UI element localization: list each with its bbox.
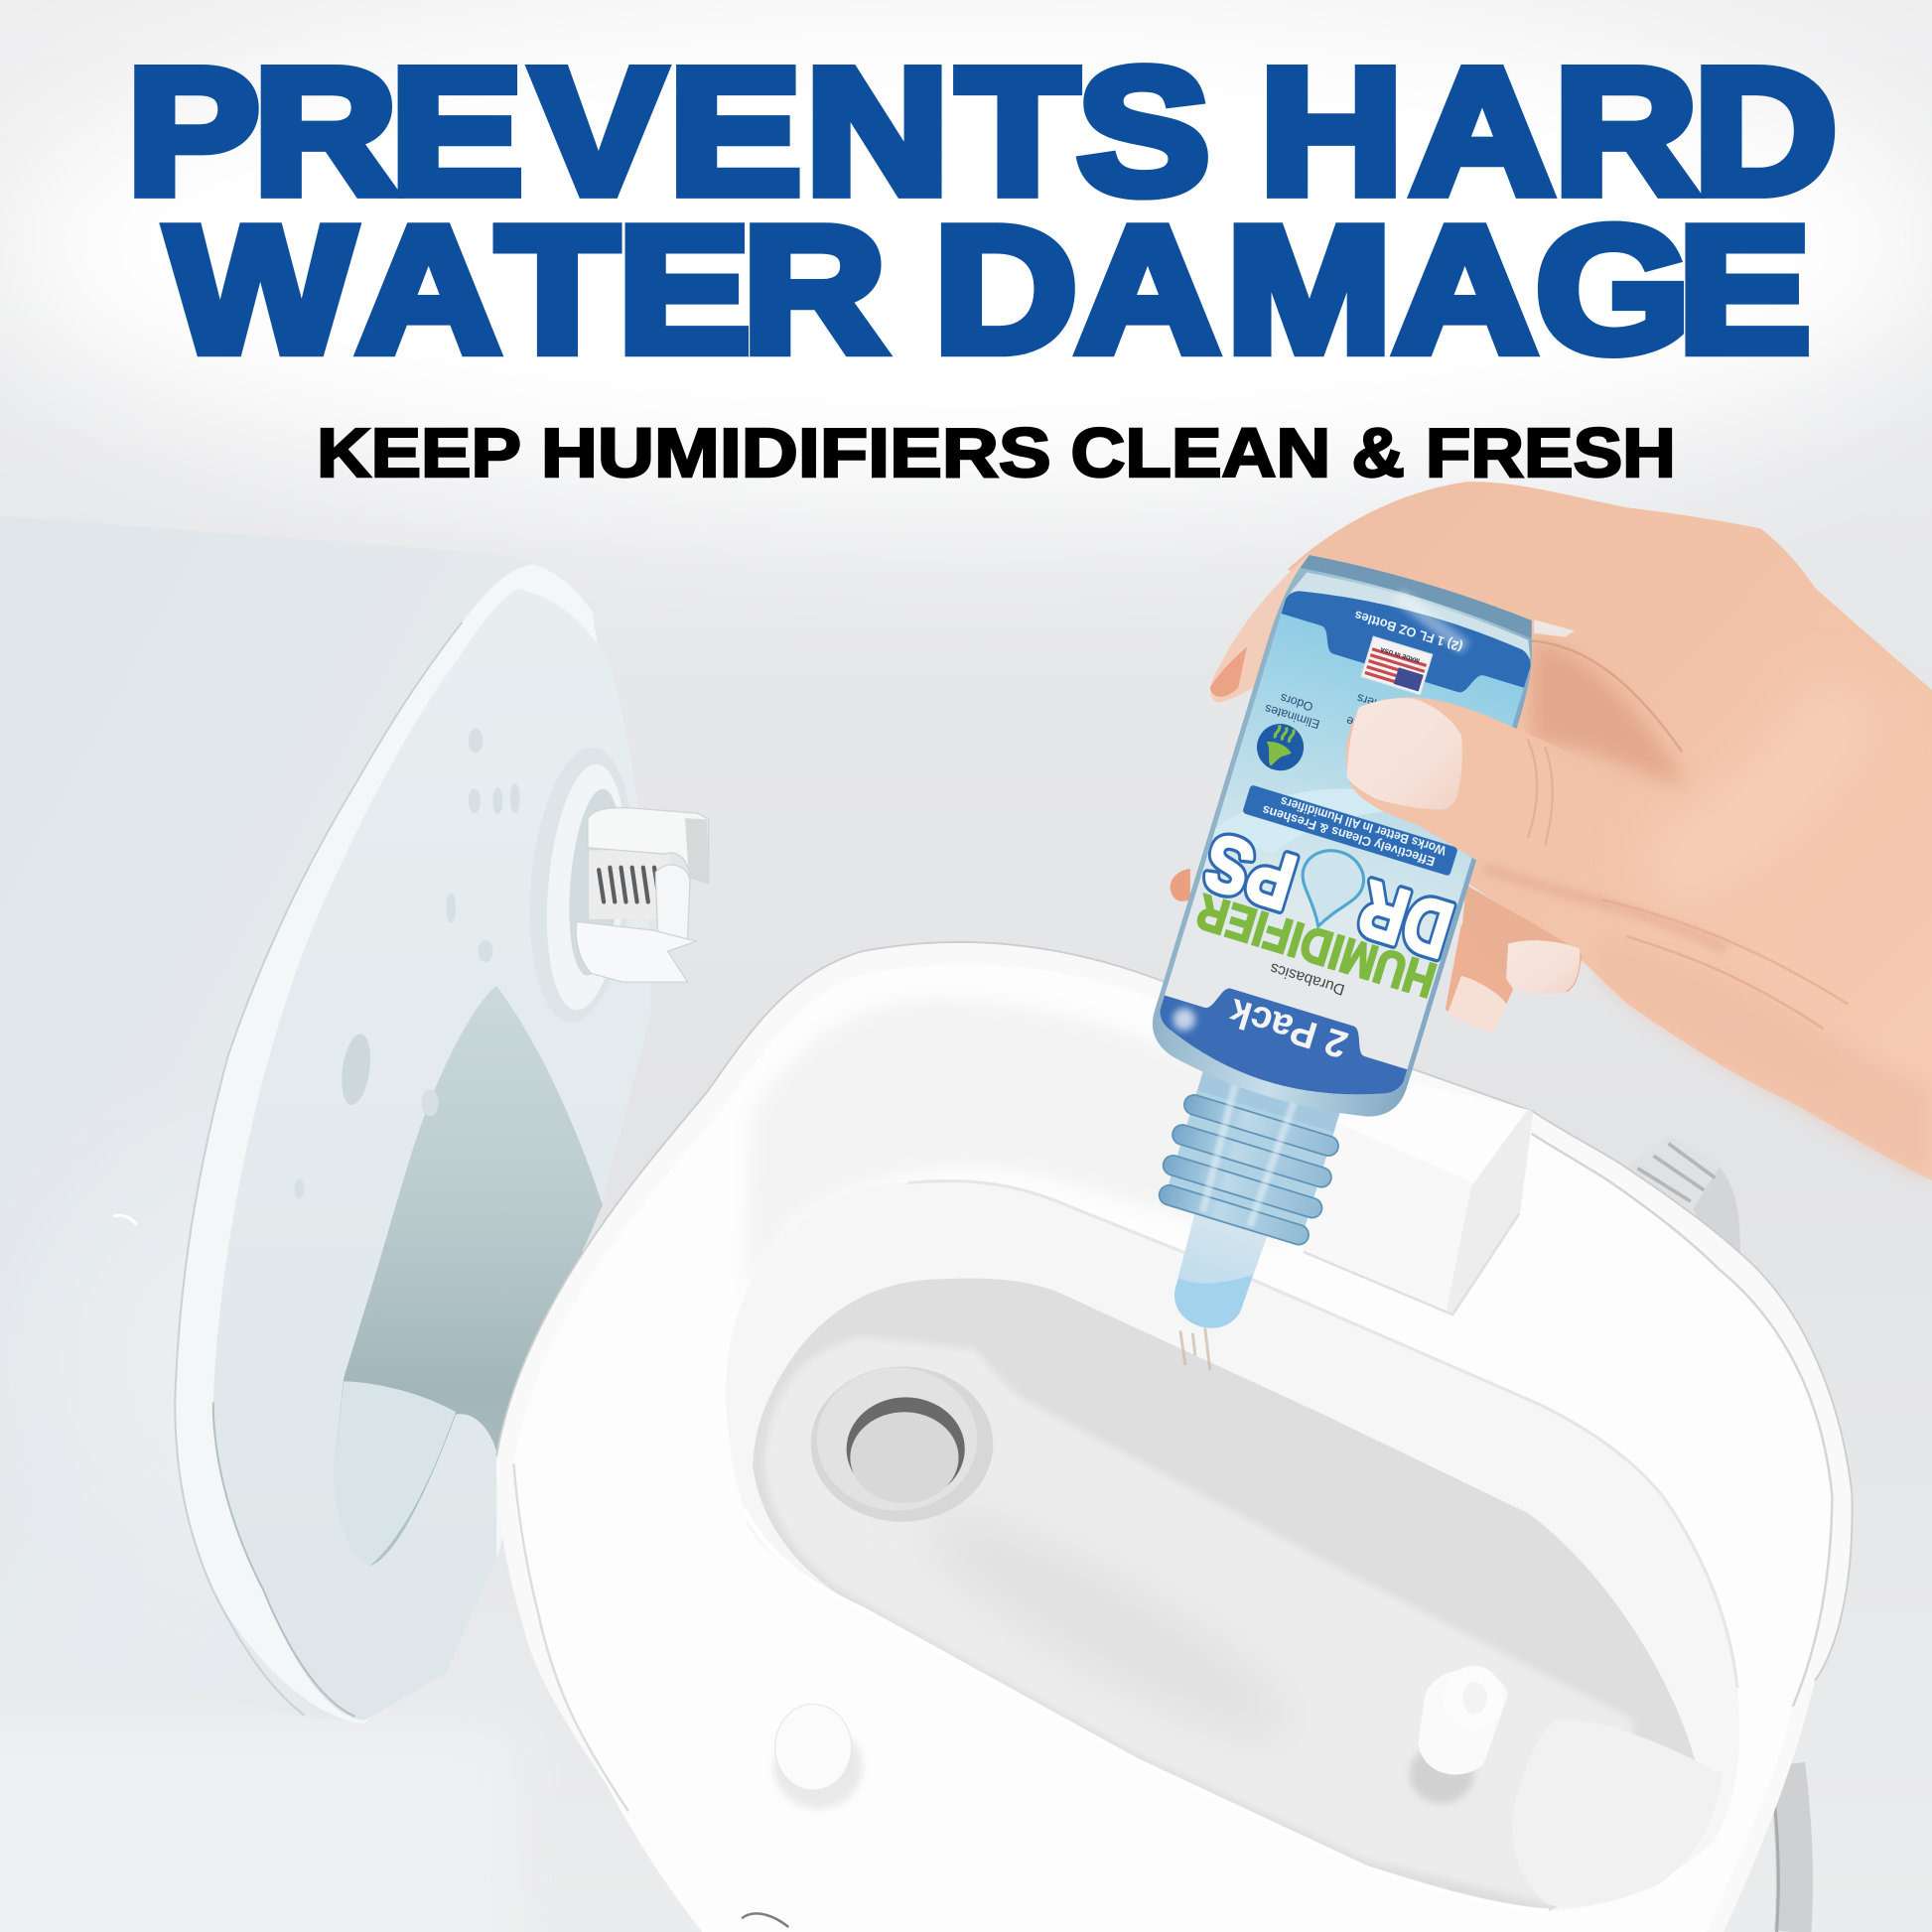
subheading <box>317 414 1676 491</box>
power cord <box>1770 1764 1794 1932</box>
white gap between fingers <box>1534 620 1575 637</box>
basin floor <box>753 1279 1701 1911</box>
subheading: HUMIDIFIERS <box>541 414 1051 491</box>
valve upper arm <box>588 808 709 884</box>
effectively cleans banner <box>1242 784 1458 877</box>
main headline: WATER DAMAGE <box>167 191 1811 390</box>
valve lower arm <box>576 921 696 982</box>
dropper bottle <box>1152 555 1532 1328</box>
tank valve with spring <box>519 743 709 1027</box>
raised step block behind bottle <box>1304 1069 1529 1314</box>
humidifier water tank <box>0 516 651 1724</box>
USA flag: MADE IN USA <box>1379 645 1421 664</box>
basin front lip <box>745 1509 1549 1911</box>
tank rim <box>175 564 650 1724</box>
tank body <box>0 516 650 1723</box>
notch lower lip <box>334 1381 456 1566</box>
dropper tip <box>1164 1206 1270 1337</box>
second icon partly hidden <box>1360 752 1419 810</box>
hand behind bottle <box>1171 482 1932 1180</box>
hole in tank face <box>338 1033 374 1107</box>
bottle base glass <box>1301 547 1538 638</box>
partly hidden benefit text: Softeners <box>1355 691 1410 720</box>
drop icon <box>1301 849 1366 928</box>
eliminates odors caption: Eliminates <box>1263 702 1321 732</box>
subheading: FRESH <box>1426 414 1676 491</box>
HUMIDIFIER wordmark: HUMIDIFIER <box>1190 884 1443 1009</box>
thumb knuckle creases <box>1528 740 1553 845</box>
effectively cleans banner: Effectively Cleans & Freshens <box>1260 802 1437 870</box>
humidifier base <box>496 942 1853 1932</box>
pack size text: (2) 1 FL OZ Bottles <box>1352 608 1464 655</box>
drain <box>811 1366 993 1522</box>
DROPS logotype: PS <box>1194 817 1306 927</box>
base outer shell <box>496 942 1853 1932</box>
main headline <box>127 32 1837 390</box>
odor icon <box>1257 724 1305 770</box>
subheading: CLEAN <box>1070 414 1330 491</box>
notch in tank <box>334 986 603 1566</box>
subheading: KEEP <box>317 414 521 491</box>
lower palm band <box>1596 936 1932 1180</box>
index finger <box>1210 554 1343 702</box>
thumb over bottle <box>1346 697 1725 949</box>
main headline: PREVENTS HARD <box>127 32 1837 231</box>
upper rim shading <box>746 999 1307 1294</box>
effectively cleans banner: Works Better In All Humidifiers <box>1279 794 1448 859</box>
brand mark on base <box>742 1913 788 1927</box>
bottle neck threads <box>1152 1055 1354 1249</box>
water stream <box>1180 1328 1210 1370</box>
palm and back of hand <box>1288 482 1932 1180</box>
brand name: Durabasics <box>1268 959 1346 998</box>
label: Reliable <box>1344 714 1391 740</box>
right peg <box>1410 1666 1508 1804</box>
USA flag <box>1361 636 1433 695</box>
floor mottled stain <box>906 1485 1311 1767</box>
tank face <box>213 589 651 1721</box>
label bottom band <box>1139 969 1420 1141</box>
middle finger <box>1171 869 1190 901</box>
subheading: & <box>1351 414 1405 491</box>
DROPS logotype <box>1202 832 1457 963</box>
thumbnail <box>1346 698 1462 810</box>
shadow under thumb <box>1484 868 1725 949</box>
DROPS logotype: PS <box>1194 817 1306 927</box>
float block <box>1512 1720 1723 1907</box>
DROPS logotype: DR <box>1349 864 1461 975</box>
label <box>1160 591 1531 1094</box>
glass highlights <box>1171 1006 1198 1034</box>
power cord clip <box>1625 1135 1740 1257</box>
valve spring <box>589 850 670 919</box>
bottle body <box>1152 555 1532 1117</box>
label: Odors <box>1279 691 1314 714</box>
ring finger <box>1460 885 1583 992</box>
water swoosh <box>1213 788 1384 835</box>
basin <box>726 1180 1739 1911</box>
label top band <box>1281 591 1531 693</box>
2 pack text: 2 Pack <box>1224 990 1352 1066</box>
DROPS logotype: DR <box>1349 864 1461 975</box>
floor lighter plateau <box>763 1337 1651 1903</box>
water droplets <box>295 728 520 1199</box>
hand shading <box>1532 640 1688 788</box>
left peg <box>773 1704 863 1809</box>
base inner rim <box>514 964 1832 1932</box>
little finger <box>1446 924 1513 1033</box>
valve plunger <box>655 865 690 939</box>
